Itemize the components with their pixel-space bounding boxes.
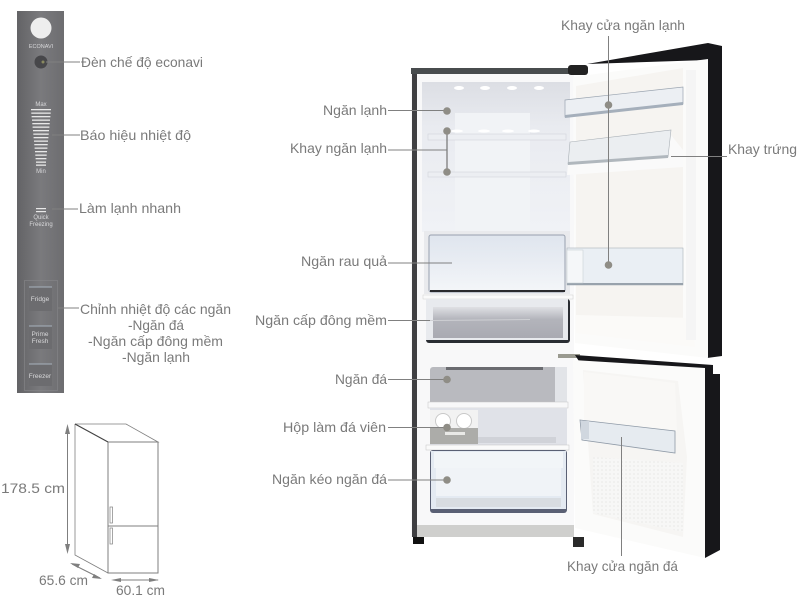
callout: freezer door tray: Khay cửa ngăn đá xyxy=(567,558,678,574)
temperature buttons: Fridge xyxy=(31,296,50,303)
callout: freezer drawer xyxy=(272,471,451,487)
depth arrow xyxy=(70,563,102,579)
quick freezing indicator: Quick xyxy=(33,215,50,221)
panel callout: econavi lamp: Đèn chế độ econavi xyxy=(81,54,203,70)
lower door tray in fridge xyxy=(567,248,683,285)
egg tray xyxy=(567,130,683,175)
callout: fridge compartment xyxy=(323,102,451,118)
ice box xyxy=(430,410,478,444)
icon: econavi lamp xyxy=(34,56,48,68)
econavi logo text: ECONAVI xyxy=(29,44,54,50)
temperature scale: Min xyxy=(36,169,46,175)
icon: econavi sensor xyxy=(30,18,52,38)
height label: 178.5 cm xyxy=(1,480,65,496)
panel callout: temperature signal: Báo hiệu nhiệt độ xyxy=(80,127,191,143)
freezer door tray xyxy=(580,420,675,453)
soft freeze drawer xyxy=(426,299,570,343)
LED lights xyxy=(451,86,544,132)
depth label: 65.6 cm xyxy=(39,572,88,588)
panel callout: compartment temperature: -Ngăn đá xyxy=(128,317,184,333)
callout: freezer compartment: Ngăn đá xyxy=(335,371,387,387)
temperature buttons: Prime xyxy=(32,331,49,338)
dimension diagram xyxy=(1,424,165,598)
callout: fridge door trays xyxy=(561,17,685,269)
control panel xyxy=(17,11,64,393)
panel callout: quick freezing: Làm lạnh nhanh xyxy=(79,200,181,216)
callout: ice box: Hộp làm đá viên xyxy=(283,419,386,435)
callout: fridge shelves xyxy=(290,127,451,176)
quick freezing indicator: Freezing xyxy=(29,222,53,228)
panel callout: compartment temperature: -Ngăn cấp đông mềm xyxy=(88,333,223,349)
refrigerator photo xyxy=(411,43,722,558)
temperature scale xyxy=(31,102,51,175)
callout: ice box xyxy=(283,419,451,435)
callout: egg tray xyxy=(671,141,797,157)
panel callout: compartment temperature: Chỉnh nhiệt độ các ngăn xyxy=(80,301,231,317)
callout: freezer drawer: Ngăn kéo ngăn đá xyxy=(272,471,387,487)
height arrow xyxy=(65,424,70,554)
fridge compartment xyxy=(422,82,570,232)
cabinet body xyxy=(411,65,588,547)
temperature buttons: Freezer xyxy=(29,373,52,380)
lower door xyxy=(573,355,720,558)
temperature buttons xyxy=(24,280,58,390)
top door tray xyxy=(565,87,683,117)
callout: egg tray: Khay trứng xyxy=(728,141,797,157)
freezer compartment xyxy=(426,367,569,450)
callout: freezer compartment xyxy=(335,371,451,387)
upper door xyxy=(565,43,722,358)
callout: freezer door tray xyxy=(567,437,678,574)
width label: 60.1 cm xyxy=(116,582,165,598)
callout: soft freeze drawer: Ngăn cấp đông mềm xyxy=(255,312,387,328)
callout: vegetable drawer: Ngăn rau quả xyxy=(301,253,387,269)
temperature buttons: Fresh xyxy=(32,338,49,345)
panel callout: compartment temperature xyxy=(58,301,231,365)
width arrow xyxy=(111,578,159,582)
callout: fridge compartment: Ngăn lạnh xyxy=(323,102,387,118)
quick freezing indicator xyxy=(29,208,53,228)
callout: fridge door trays: Khay cửa ngăn lạnh xyxy=(561,17,685,33)
vegetable drawer xyxy=(423,231,573,299)
panel callout: compartment temperature: -Ngăn lạnh xyxy=(122,349,190,365)
fridge outline xyxy=(75,424,158,573)
freezer drawer xyxy=(430,450,567,513)
shelves xyxy=(428,134,566,177)
callout: fridge shelves: Khay ngăn lạnh xyxy=(290,140,387,156)
temperature scale: Max xyxy=(35,102,47,108)
